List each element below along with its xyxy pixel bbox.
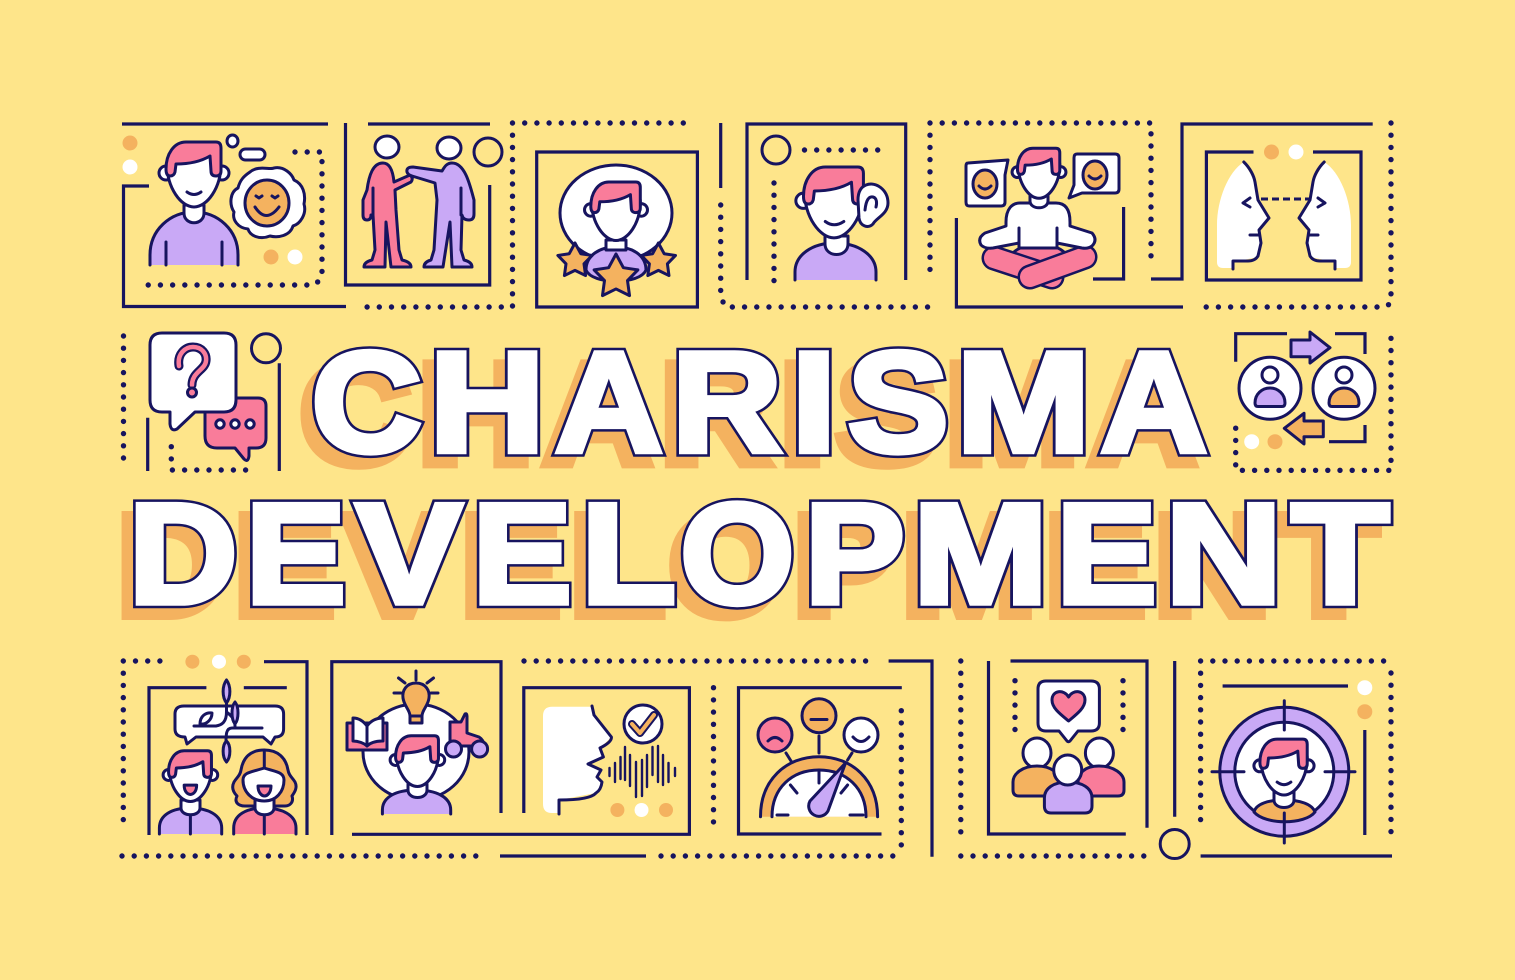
icon: neutral face [802,699,836,733]
title outline: A [1101,322,1207,482]
icon: roller skate [446,714,488,757]
icon: three stars [558,243,676,296]
icon: sound wave [610,746,675,797]
title shadow: I [780,335,825,494]
title shadow: E [234,486,334,645]
title shadow [117,334,1378,646]
icon: woman talking [233,750,296,834]
icon: purple arrow [1291,332,1330,363]
icon: thought cloud with smile [227,135,305,238]
title outline: M [913,475,1048,634]
title fill: V [356,474,462,633]
title shadow: R [661,335,770,494]
icon: target ring [1212,701,1355,843]
icon: man bust [150,142,238,265]
icon: three people [1013,738,1124,813]
title outline: R [672,324,782,482]
panel: two faces eye contact [1202,123,1391,307]
title outline: V [356,474,462,633]
icon: large ear [858,184,888,226]
title shadow: D [117,486,226,646]
title shadow: L [570,485,664,645]
title outline: A [555,322,663,481]
title fill: N [1165,475,1282,634]
title [117,322,1389,646]
title fill [129,322,1389,634]
title fill: M [913,475,1048,634]
bottom rule [500,854,646,858]
title fill: D [129,474,237,634]
panel: conversation growth couple [123,655,307,835]
title fill: A [1101,322,1207,482]
title fill: M [957,324,1090,482]
title fill: L [581,474,676,633]
icon: happy face [844,718,878,752]
panel: exchange between two people [1236,332,1391,470]
title outline: E [1056,475,1157,634]
panel: group love [961,661,1189,858]
icon: pink ellipsis bubble [205,398,266,460]
title fill: O [680,474,794,633]
icon: question bubble [150,333,236,430]
title outline: N [1165,475,1282,634]
title outline: M [957,324,1090,482]
title fill: E [246,474,346,633]
panel: listening person [721,123,931,307]
panel: two people talking [346,123,502,285]
title fill: I [791,323,836,482]
icon: right speech bubble [1069,154,1119,198]
icon: open book [347,718,387,750]
icon: purple person [407,137,474,267]
title outline: O [680,474,794,633]
title outline: D [129,474,237,634]
panel: mood gauge [738,661,932,857]
icon: left profile [1217,162,1269,269]
icon: sad face [758,718,792,752]
title fill: S [848,323,948,482]
title outline: T [1291,475,1389,634]
title shadow: N [1154,486,1270,645]
icon: speaking profile [543,706,611,814]
icon: speech bubble with vine [175,680,284,762]
icon: orange arrow [1284,413,1323,444]
panel: question and answer bubbles [124,333,280,471]
title outline: L [581,474,676,633]
icon: outlined circle [1160,830,1189,858]
title outline: S [848,323,948,482]
title shadow: H [418,335,533,494]
icon: right profile [1299,162,1351,269]
title shadow: E [461,485,560,645]
icon: man talking [159,751,222,834]
title fill: C [312,324,422,482]
title outline: E [246,474,346,633]
panel: learning and hobbies [332,662,501,835]
panel: star rated person [363,123,697,307]
icon: check badge [624,705,662,743]
icon: left speech bubble [966,160,1008,206]
panel: positive thinking man [122,124,346,306]
title shadow: C [300,335,410,494]
icon: left person circle [1239,357,1301,419]
title fill: A [555,322,663,481]
title outline [129,322,1389,634]
title shadow: M [902,487,1036,645]
icon: light bulb [394,671,438,723]
title shadow: T [1280,487,1378,646]
icon: right person circle [1313,357,1375,419]
title fill: T [1291,475,1389,634]
title fill: E [473,474,572,633]
title fill: R [672,324,782,482]
icon: pink person [363,136,412,267]
title shadow: O [669,485,783,645]
title shadow: E [1045,487,1145,646]
title shadow: A [1089,334,1196,493]
title outline: H [429,323,545,482]
title shadow: A [544,334,651,493]
bottom dotted rule [122,853,482,859]
title shadow: P [793,486,893,645]
title fill: H [429,323,545,482]
icon: heart bubble [1038,681,1099,742]
panel: target on person [1201,661,1392,856]
title outline: P [805,474,905,633]
title shadow: S [836,335,937,494]
title outline: I [791,323,836,482]
bottom right dotted rule [661,853,901,859]
icon: speedometer [760,757,878,817]
title outline: E [473,474,572,633]
icon: man bust [382,736,451,814]
panel: meditating person [930,123,1373,307]
title outline: C [312,324,422,482]
title shadow: V [345,486,450,645]
panel: voice check profile [352,661,872,834]
icon: cross-legged figure [980,148,1095,280]
title fill: P [805,474,905,633]
title shadow: M [945,335,1079,494]
title fill: E [1056,475,1157,634]
